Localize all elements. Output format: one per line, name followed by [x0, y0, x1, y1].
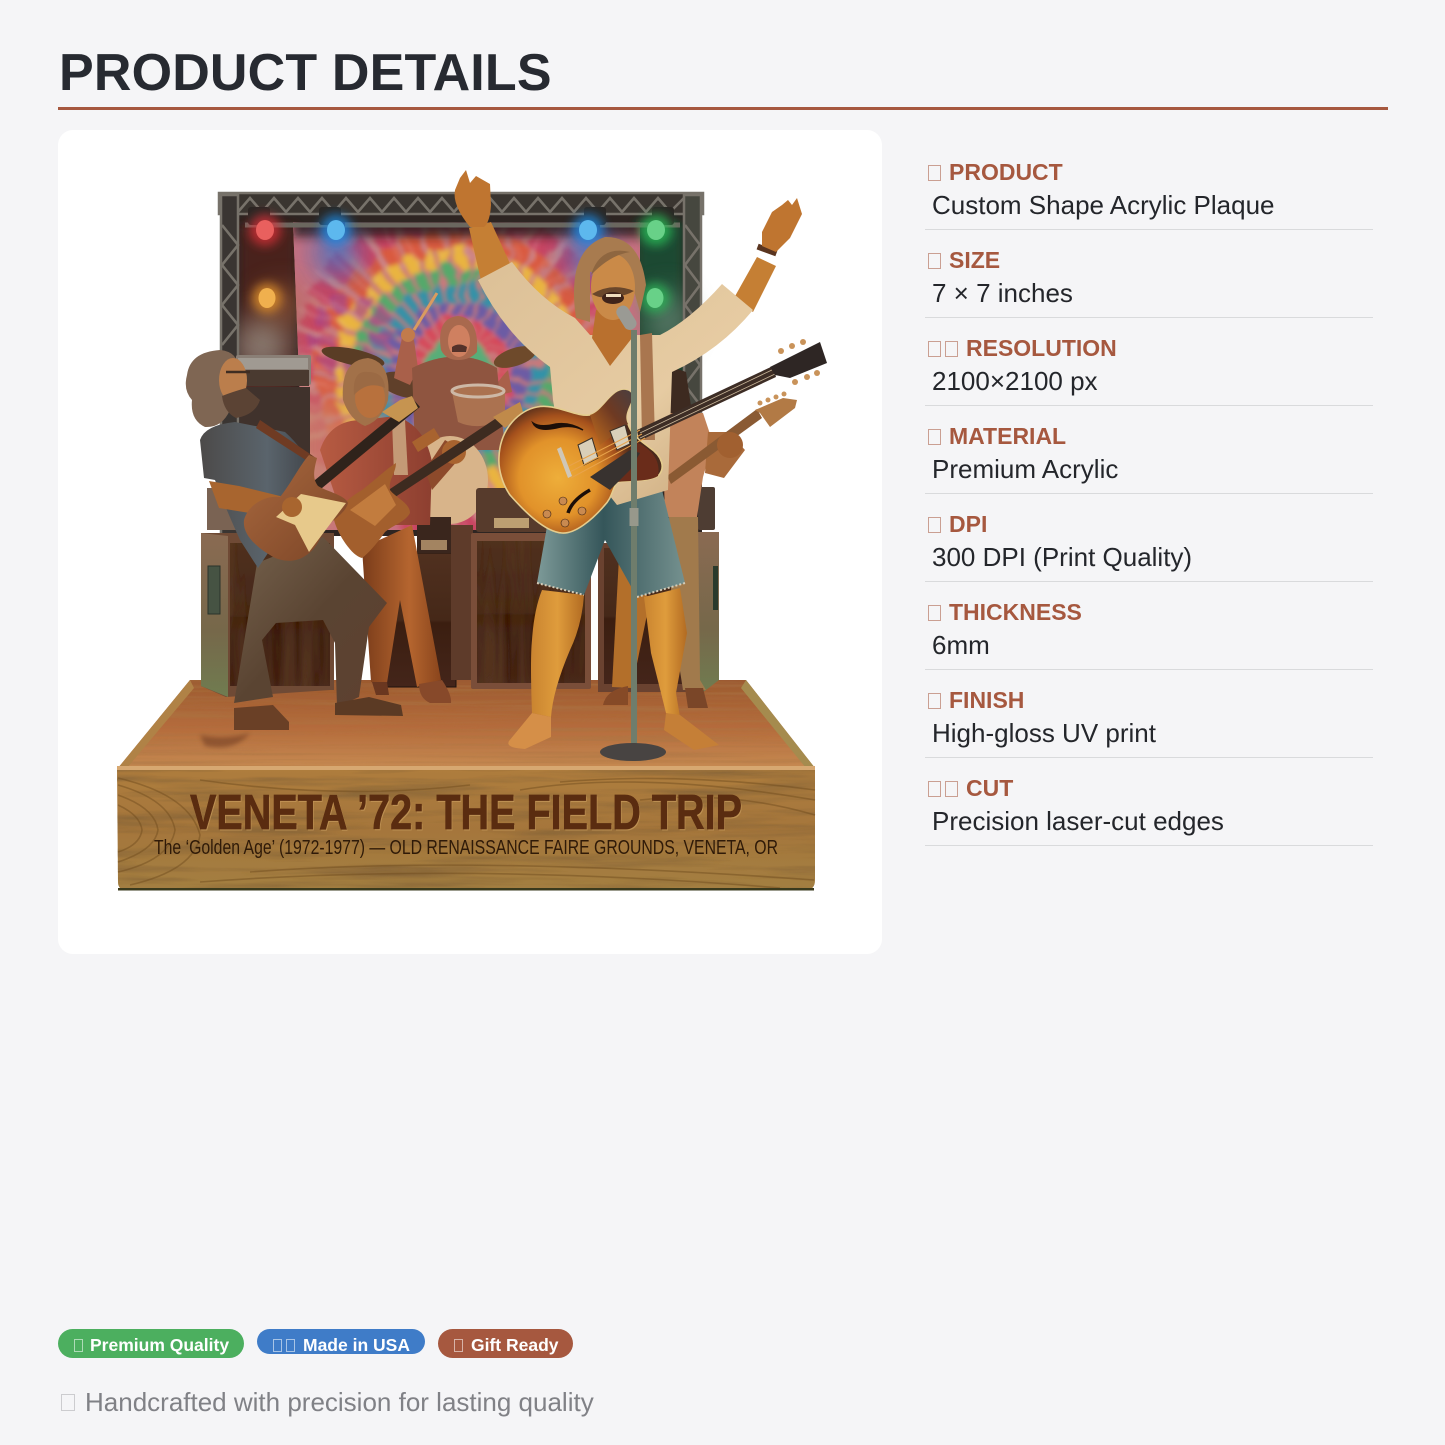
spec: resolution: RESOLUTION: [966, 334, 1117, 360]
badge: premium quality: [58, 1329, 244, 1358]
neck and head: [592, 310, 632, 366]
speaker cabinets: [201, 487, 719, 697]
spec: finish: [925, 686, 1373, 758]
spec: thickness: 6mm: [932, 630, 990, 660]
knobs: [543, 497, 586, 527]
guitar neck, headstock and body: [366, 415, 506, 513]
spec: material: Premium Acrylic: [932, 454, 1118, 484]
drummer: [320, 293, 539, 524]
torso: [412, 356, 505, 450]
badge: gift ready: Gift Ready: [471, 1335, 559, 1355]
stick: [414, 293, 437, 330]
floor: [118, 680, 815, 768]
spec: finish: FINISH: [949, 686, 1024, 712]
engraved subtitle: The ‘Golden Age’ (1972-1977) — OLD RENAISSANCE FAIRE GROUNDS, VENETA, OR: [154, 836, 778, 859]
tom drum: [452, 392, 505, 426]
mic: [614, 303, 639, 332]
spec: resolution: [925, 334, 1373, 406]
right cabinet: [698, 487, 715, 530]
guitar neck: [637, 366, 776, 441]
guitar: [309, 399, 420, 493]
tie-dye tapestry: [293, 222, 640, 530]
figure: left guitarist: [186, 350, 420, 730]
spec: material: MATERIAL: [949, 422, 1066, 448]
panel: product image card: [58, 130, 882, 954]
badge: made in usa: Made in USA: [303, 1335, 410, 1355]
spec: size: 7 × 7 inches: [932, 278, 1073, 308]
head: [186, 350, 238, 427]
illustration: band diorama plaque: [117, 170, 827, 890]
truss frame: [219, 193, 703, 535]
figure: middle guitarist: [320, 358, 523, 703]
plaque base: [117, 680, 815, 890]
spec: size: [925, 246, 1373, 318]
pickups: [578, 438, 598, 465]
smoke: [234, 317, 290, 373]
spec: cut: [925, 774, 1373, 846]
cymbals: [320, 343, 386, 371]
mic stand: [631, 330, 637, 750]
spec: dpi: 300 DPI (Print Quality): [932, 542, 1192, 572]
spec: product: Custom Shape Acrylic Plaque: [932, 190, 1275, 220]
spec: product: [925, 158, 1373, 230]
plaque base: VENETA ’72: THE FIELD TRIP: [190, 786, 742, 840]
spec: resolution: 2100×2100 px: [932, 366, 1098, 396]
spec: material: [925, 422, 1373, 494]
front face: [117, 768, 815, 890]
f-holes: [533, 423, 583, 430]
arms: [394, 338, 418, 385]
middle cabinet: [384, 553, 456, 687]
figure: lead singer: [455, 170, 827, 761]
arm: [209, 481, 314, 522]
guitar body: [499, 390, 662, 533]
pickguard: [590, 450, 640, 490]
stage backdrop: [218, 192, 704, 536]
footer tagline: Handcrafted with precision for lasting quality: [85, 1387, 594, 1417]
badge: premium quality: Premium Quality: [90, 1335, 229, 1355]
shorts: [537, 490, 685, 597]
engraved title: VENETA ’72: THE FIELD TRIP: [191, 788, 743, 842]
spec: finish: High-gloss UV print: [932, 718, 1156, 748]
title: PRODUCT DETAILS: [59, 44, 552, 102]
spec: dpi: DPI: [949, 510, 987, 536]
guitar strap: [640, 333, 655, 440]
title underline: [58, 107, 1388, 110]
left amp and cabinet: [207, 488, 300, 530]
spec: thickness: THICKNESS: [949, 598, 1082, 624]
arms and hands: [469, 222, 512, 285]
top shadow and side fade: [293, 213, 643, 237]
strings: [565, 430, 645, 478]
spec: cut: CUT: [966, 774, 1013, 800]
badge: gift ready: [438, 1329, 573, 1358]
spec: cut: Precision laser-cut edges: [932, 806, 1224, 836]
guitar headstock: [770, 342, 827, 378]
spec: thickness: [925, 598, 1373, 670]
back amp stack: [236, 355, 311, 497]
bass drum: [412, 436, 488, 524]
legs: [531, 590, 584, 717]
spec: size: SIZE: [949, 246, 1000, 272]
figure: rear right bassist: [603, 367, 797, 708]
center cabinet: [476, 488, 564, 532]
stage lights: [248, 207, 674, 313]
badge: made in usa: [257, 1329, 425, 1354]
spec: dpi: [925, 510, 1373, 582]
head: [440, 316, 477, 360]
shirt: [478, 262, 753, 505]
spec: product: PRODUCT: [949, 158, 1063, 184]
